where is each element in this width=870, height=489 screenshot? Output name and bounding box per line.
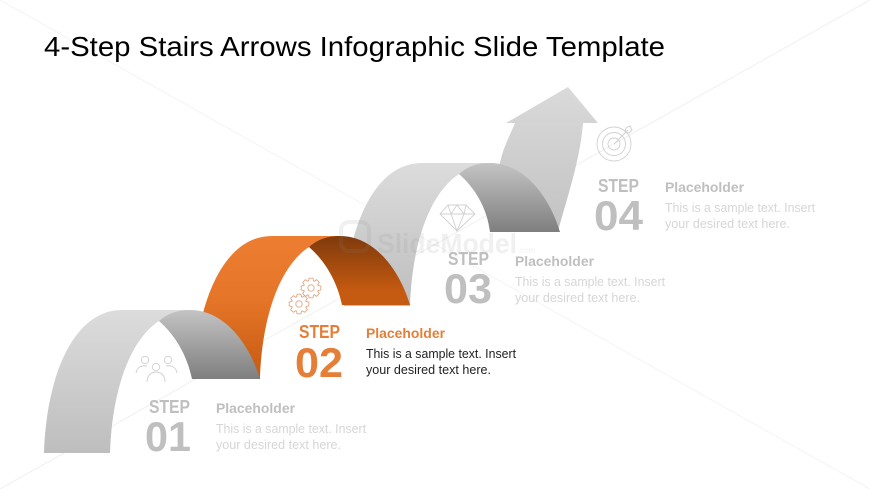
step 4 description: This is a sample text. Insert	[665, 200, 815, 215]
watermark	[341, 222, 536, 259]
step 1 number: 01	[145, 413, 191, 460]
step 1 heading: Placeholder	[216, 400, 296, 416]
arch: step 1 back band	[159, 310, 260, 379]
step 1 label: STEP	[149, 397, 190, 417]
arch: step 3 front band	[344, 163, 490, 306]
icon: target	[597, 126, 632, 161]
title: 4-Step Stairs Arrows Infographic Slide Template	[44, 31, 665, 62]
step 3 text block	[444, 249, 665, 312]
watermark: .com	[518, 246, 536, 255]
arch: step 2 front band	[194, 236, 340, 379]
step 2 number: 02	[295, 339, 343, 386]
step 3 label: STEP	[448, 249, 489, 269]
icon: people	[136, 356, 177, 382]
watermark: SlideModel	[377, 228, 517, 259]
step 2 text block	[295, 322, 516, 386]
step 2 description: your desired text here.	[366, 362, 491, 377]
step 3 number: 03	[444, 265, 492, 312]
step 2 description: This is a sample text. Insert	[366, 346, 516, 361]
step 2 heading: Placeholder	[366, 325, 446, 341]
step 1 description: your desired text here.	[216, 437, 341, 452]
arch: step 2 back band	[309, 236, 410, 305]
icon: gears	[289, 278, 321, 314]
step 3 description: This is a sample text. Insert	[515, 274, 665, 289]
step 3 description: your desired text here.	[515, 290, 640, 305]
icon: diamond	[440, 205, 475, 231]
step 4 label: STEP	[598, 176, 639, 196]
step 3 heading: Placeholder	[515, 253, 595, 269]
arch: step 3 back band	[459, 163, 560, 232]
arrow: step 4 rising arrow	[490, 87, 598, 231]
step 1 description: This is a sample text. Insert	[216, 421, 366, 436]
step 1 text block	[145, 397, 366, 460]
step 4 number: 04	[594, 192, 644, 239]
arch: step 1 front band	[44, 310, 190, 453]
step 4 heading: Placeholder	[665, 179, 745, 195]
step 4 description: your desired text here.	[665, 216, 790, 231]
step 4 text block	[594, 176, 815, 239]
step 2 label: STEP	[299, 322, 340, 342]
